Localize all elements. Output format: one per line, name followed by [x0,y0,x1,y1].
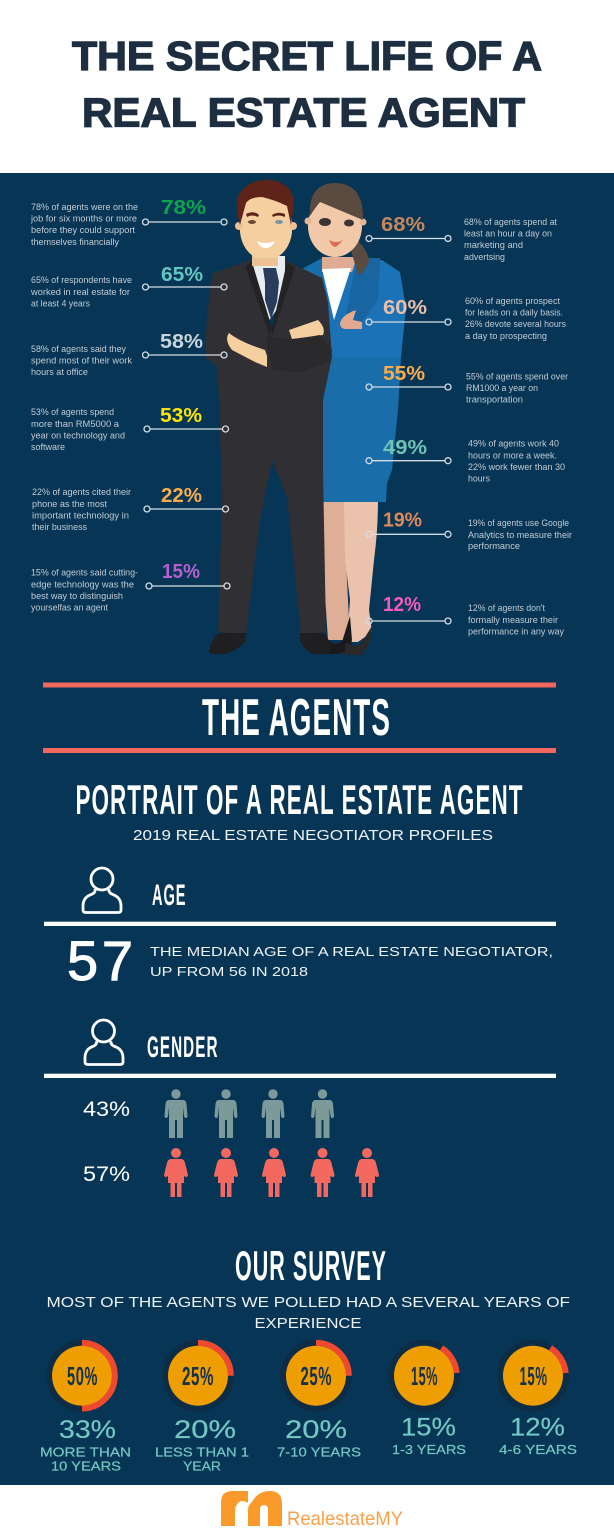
illustration: woman agent [300,183,406,655]
heading: the agents with red bars: THE AGENTS [202,689,391,747]
callout: 15%: edge technology was the [31,580,134,590]
callout: 65%: 65% of respondents have [31,275,132,285]
donut: 15% 1-3 years: 15% [411,1361,438,1391]
callout: 78%: 78% [161,197,206,219]
callout: 12%: formally measure their [468,615,558,625]
donut: 15% 1-3 years [391,1343,466,1457]
callout: 53%: year on technology and [31,430,125,440]
logo: RealestateMY [221,1491,403,1530]
callout: 78%: themselves financially [31,237,120,247]
callout: 58%: 58% [160,331,203,353]
callout: 12%: 12% [383,594,421,616]
divider: gender rule [44,1074,556,1078]
donut: 25% less than 1 year: 20% [174,1416,236,1444]
donut: 25% 7-10 years: 7-10 YEARS [277,1445,361,1460]
donut: 15% 1-3 years: 15% [401,1414,456,1442]
callout: 53% [31,405,228,452]
callout: 55%: transportation [466,394,523,404]
donut: 15% 1-3 years: 1-3 YEARS [392,1442,466,1457]
stat: median age 57: 57 [67,929,133,992]
callout: 58%: hours at office [31,367,88,377]
callout: 65%: 65% [161,264,203,286]
donut: 15% 4-6 years [499,1343,577,1457]
heading: the agents with red bars [43,682,556,753]
callout: 15% [31,561,230,612]
donut: 25% 7-10 years: 25% [300,1361,332,1391]
callout: 15%: yourselfas an agent [31,602,109,612]
infographic canvas: AGE [152,879,186,912]
donut: 25% less than 1 year: LESS THAN 1 [155,1445,249,1460]
callout: 49%: hours or more a week. [468,450,557,460]
donut: 50% more than 10 years: 33% [59,1416,116,1444]
donut: 50% more than 10 years: 10 YEARS [51,1459,121,1474]
callout: 22%: important technology in [32,510,129,520]
callout: 55%: 55% [383,363,425,385]
callout: 15%: best way to distinguish [31,591,123,601]
title: REAL ESTATE AGENT [82,90,525,136]
callout: 19%: performance [468,541,520,551]
callout: 68%: 68% [381,214,425,236]
title: THE SECRET LIFE OF A [72,33,542,79]
callout: 65% [30,264,227,308]
icon: age person [83,868,121,912]
callout: 49%: 22% work fewer than 30 [468,462,565,472]
callout: 22%: phone as the most [32,499,108,509]
stat row: 57% women: 57% [83,1163,130,1186]
callout: 19%: 19% of agents use Google [468,518,569,528]
donut: 15% 4-6 years: 4-6 YEARS [499,1442,577,1457]
text: survey intro [46,1294,570,1332]
callout: 55%: RM1000 a year on [466,383,538,393]
callout: 15%: 15% [162,561,200,583]
callout: 58% [31,331,227,377]
callout: 55%: 55% of agents spend over [466,372,568,382]
text: median age description [150,944,553,979]
subheading: profiles: 2019 REAL ESTATE NEGOTIATOR PROFILES [133,827,493,844]
callout: 12%: 12% of agents don't [468,603,546,613]
callout: 19%: 19% [383,510,422,532]
callout: 65%: at least 4 years [31,298,91,308]
callout: 22%: 22% [161,485,202,507]
callout: 15%: 15% of agents said cutting- [31,568,138,578]
donut: 50% more than 10 years [40,1343,131,1474]
callout: 68%: least an hour a day on [464,229,552,239]
text: median age description: THE MEDIAN AGE OF A REAL ESTATE NEGOTIATOR, [150,944,553,959]
callout: 53%: 53% of agents spend [31,407,114,417]
callout: 53%: more than RM5000 a [31,419,119,429]
callout: 49% [366,437,565,484]
callout: 60%: 60% of agents prospect [465,296,561,306]
callout: 68%: marketing and [464,240,523,250]
callout: 19% [366,510,572,551]
logo: RealestateMY: RealestateMY [287,1508,403,1530]
callout: 12% [366,594,565,636]
donut: 25% less than 1 year [155,1343,249,1474]
callout: 49%: 49% of agents work 40 [468,439,559,449]
callout: 22% [32,485,228,532]
callout: 68% [366,214,558,262]
callout: 55% [366,363,568,404]
donut: 15% 4-6 years: 15% [520,1361,548,1391]
callout: 49%: hours [468,474,491,484]
donut: 25% 7-10 years [277,1343,361,1460]
callout: 78% [30,197,227,247]
callout: 22%: 22% of agents cited their [32,487,131,497]
callout: 68%: advertsing [464,252,505,262]
stat row: 43% men [83,1089,334,1138]
illustration: man agent [205,180,332,654]
callout: 60% [366,296,567,341]
callout: 19%: Analytics to measure their [468,530,572,540]
callout: 60%: 60% [383,297,427,319]
text: survey intro: EXPERIENCE [254,1315,362,1332]
donut: 25% 7-10 years: 20% [285,1416,347,1444]
donut: 25% less than 1 year: 25% [182,1361,214,1391]
heading: our survey: OUR SURVEY [235,1242,387,1289]
divider: age rule [44,922,556,926]
callout: 58%: 58% of agents said they [31,344,127,354]
icon: gender person [85,1020,123,1064]
text: median age description: UP FROM 56 IN 2018 [150,964,308,979]
donut: 50% more than 10 years: MORE THAN [40,1445,131,1460]
donut: 25% less than 1 year: YEAR [183,1459,221,1474]
donut: 50% more than 10 years: 50% [67,1361,98,1391]
callout: 60%: a day to prospecting [465,331,547,341]
stat row: 57% women [83,1148,379,1197]
title [72,33,542,136]
heading: gender: GENDER [147,1031,218,1064]
callout: 78%: job for six months or more [30,214,137,224]
callout: 60%: 26% devote several hours [465,319,567,329]
callout: 65%: worked in real estate for [30,287,130,297]
callout: 58%: spend most of their work [31,356,133,366]
callout: 78%: 78% of agents were on the [31,202,138,212]
callout: 12%: performance in any way [468,626,565,636]
callout: 68%: 68% of agents spend at [464,217,558,227]
callout: 78%: before they could support [31,225,136,235]
donut: 15% 4-6 years: 12% [510,1414,565,1442]
stat row: 43% men: 43% [83,1098,130,1121]
callout: 53%: 53% [160,405,202,427]
callout: 22%: their business [32,522,88,532]
callout: 53%: software [31,442,65,452]
callout: 49%: 49% [383,437,427,459]
text: survey intro: MOST OF THE AGENTS WE POLLED HAD A SEVERAL YEARS OF [46,1294,570,1311]
callout: 60%: for leads on a daily basis. [465,308,563,318]
